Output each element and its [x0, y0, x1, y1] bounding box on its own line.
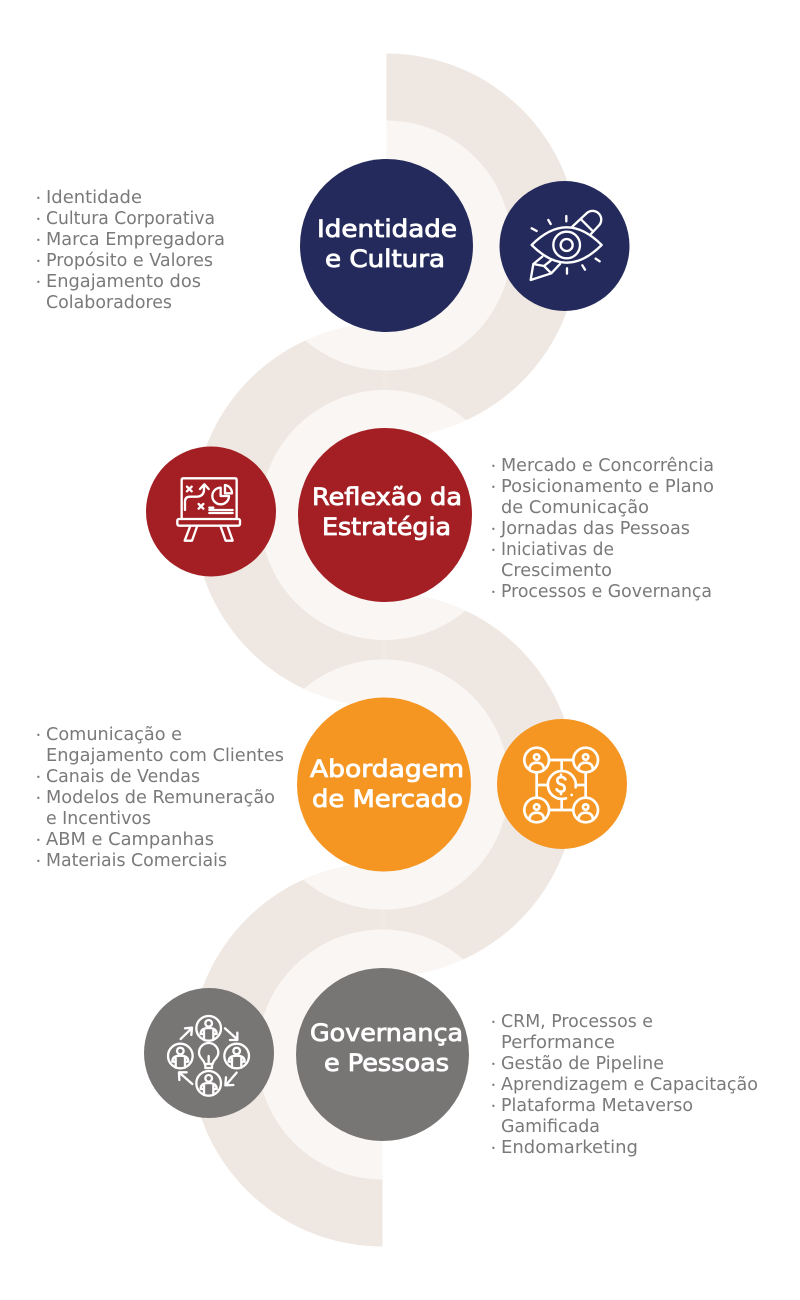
- list: Identidade e Cultura topics: •: [36, 278, 41, 287]
- list: Governança e Pessoas topics: •: [491, 1018, 496, 1027]
- step 3 heading circle: Abordagem de Mercado: [297, 698, 471, 872]
- list: Governança e Pessoas topics: •: [491, 1081, 496, 1090]
- icon: client network with dollar: [497, 719, 627, 849]
- list: Governança e Pessoas topics: Plataforma Metaverso: [501, 1096, 693, 1116]
- list: Identidade e Cultura topics: •: [36, 257, 41, 266]
- list: Abordagem de Mercado topics: [36, 725, 284, 871]
- icon: people cycle around a light bulb: [144, 988, 274, 1118]
- list: Abordagem de Mercado topics: e Incentivos: [46, 809, 151, 829]
- list: Reflexão da Estratégia topics: Crescimento: [501, 561, 612, 581]
- step 3 heading circle: Abordagem de Mercado: Abordagem: [310, 755, 464, 783]
- step 2 heading circle: Reflexão da Estratégia: [298, 428, 472, 602]
- list: Identidade e Cultura topics: Propósito e Valores: [46, 251, 213, 271]
- list: Identidade e Cultura topics: Marca Empregadora: [46, 230, 225, 250]
- list: Reflexão da Estratégia topics: [491, 456, 714, 602]
- step 4 heading circle: Governança e Pessoas: [296, 968, 469, 1141]
- list: Reflexão da Estratégia topics: •: [491, 462, 496, 471]
- list: Governança e Pessoas topics: Gestão de Pipeline: [501, 1054, 664, 1074]
- list: Reflexão da Estratégia topics: •: [491, 588, 496, 597]
- list: Governança e Pessoas topics: Endomarketing: [501, 1138, 638, 1158]
- list: Abordagem de Mercado topics: Engajamento com Clientes: [46, 746, 284, 766]
- list: Identidade e Cultura topics: [36, 188, 225, 313]
- list: Governança e Pessoas topics: [491, 1012, 758, 1158]
- list: Reflexão da Estratégia topics: •: [491, 525, 496, 534]
- step 4 heading circle: Governança e Pessoas: e Pessoas: [324, 1049, 449, 1077]
- icon: strategy presentation board: [146, 446, 276, 576]
- list: Reflexão da Estratégia topics: de Comunicação: [501, 498, 649, 518]
- list: Governança e Pessoas topics: CRM, Processos e: [501, 1012, 653, 1032]
- list: Reflexão da Estratégia topics: Jornadas das Pessoas: [500, 519, 690, 539]
- list: Identidade e Cultura topics: •: [36, 215, 41, 224]
- serpentine ribbon background: [190, 54, 578, 1246]
- step 2 heading circle: Reflexão da Estratégia: Reflexão da: [312, 483, 462, 511]
- list: Reflexão da Estratégia topics: Posicionamento e Plano: [501, 477, 714, 497]
- list: Reflexão da Estratégia topics: •: [491, 483, 496, 492]
- list: Abordagem de Mercado topics: Materiais Comerciais: [46, 851, 227, 871]
- list: Governança e Pessoas topics: •: [491, 1060, 496, 1069]
- list: Abordagem de Mercado topics: Canais de Vendas: [46, 767, 200, 787]
- step 1 heading circle: Identidade e Cultura: e Cultura: [325, 245, 445, 273]
- list: Governança e Pessoas topics: •: [491, 1144, 496, 1153]
- step 1 heading circle: Identidade e Cultura: Identidade: [317, 215, 457, 243]
- list: Abordagem de Mercado topics: •: [36, 773, 41, 782]
- step 1 heading circle: Identidade e Cultura: [300, 159, 473, 332]
- list: Governança e Pessoas topics: Gamificada: [501, 1117, 600, 1137]
- list: Abordagem de Mercado topics: •: [36, 794, 41, 803]
- list: Identidade e Cultura topics: Engajamento dos: [46, 272, 201, 292]
- list: Reflexão da Estratégia topics: Mercado e Concorrência: [501, 456, 714, 476]
- step 2 heading circle: Reflexão da Estratégia: Estratégia: [322, 513, 451, 541]
- icon: eye and pencil: [500, 181, 630, 311]
- list: Abordagem de Mercado topics: •: [36, 836, 41, 845]
- list: Reflexão da Estratégia topics: Iniciativas de: [501, 540, 614, 560]
- list: Reflexão da Estratégia topics: •: [491, 546, 496, 555]
- list: Identidade e Cultura topics: Identidade: [46, 188, 142, 208]
- list: Abordagem de Mercado topics: •: [36, 857, 41, 866]
- list: Identidade e Cultura topics: Cultura Corporativa: [46, 209, 215, 229]
- list: Abordagem de Mercado topics: Comunicação e: [46, 725, 182, 745]
- list: Governança e Pessoas topics: Aprendizagem e Capacitação: [501, 1075, 758, 1095]
- list: Identidade e Cultura topics: •: [36, 236, 41, 245]
- step 4 heading circle: Governança e Pessoas: Governança: [310, 1019, 463, 1047]
- list: Reflexão da Estratégia topics: Processos e Governança: [501, 582, 712, 602]
- list: Abordagem de Mercado topics: ABM e Campanhas: [46, 830, 214, 850]
- list: Governança e Pessoas topics: Performance: [501, 1033, 615, 1053]
- list: Identidade e Cultura topics: •: [36, 194, 41, 203]
- list: Abordagem de Mercado topics: •: [36, 731, 41, 740]
- list: Identidade e Cultura topics: Colaboradores: [46, 293, 172, 313]
- list: Abordagem de Mercado topics: Modelos de Remuneração: [46, 788, 275, 808]
- list: Governança e Pessoas topics: •: [491, 1102, 496, 1111]
- step 3 heading circle: Abordagem de Mercado: de Mercado: [312, 785, 463, 813]
